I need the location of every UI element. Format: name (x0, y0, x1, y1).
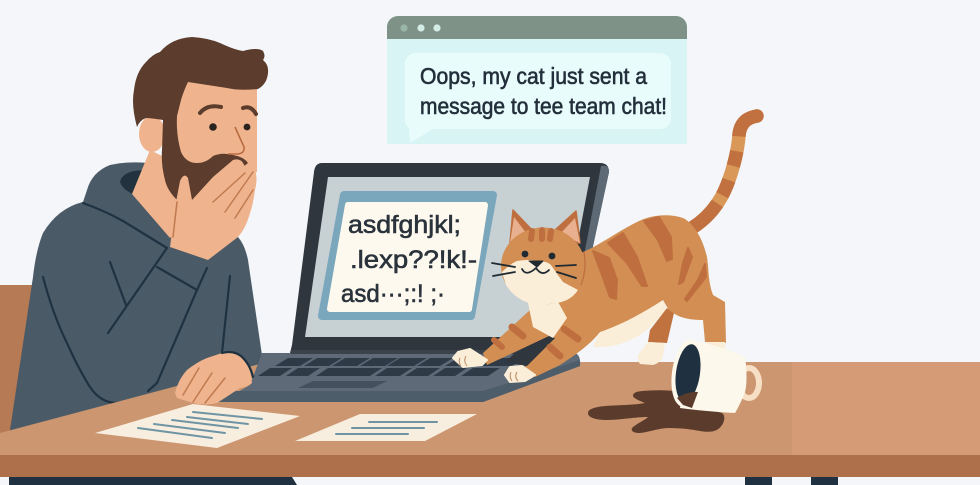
man (10, 37, 268, 432)
neck (132, 150, 200, 238)
coffee pouring out (677, 392, 698, 408)
chat message text: Oops, my cat just sent a (420, 63, 647, 89)
window control dots (400, 24, 441, 32)
man's lower hand (175, 352, 253, 404)
cat mouth (522, 268, 549, 273)
hand on mouth (170, 159, 256, 260)
eyes (209, 123, 250, 131)
table (0, 362, 980, 477)
hair and beard (133, 37, 268, 200)
paper right (295, 414, 477, 441)
cat (453, 109, 764, 382)
gibberish text: asdfghjkl; (348, 211, 461, 239)
text window paper (330, 205, 485, 309)
cat whiskers (492, 263, 576, 278)
chat message text (420, 63, 667, 119)
laptop lid and screen (290, 163, 609, 353)
cat muzzle (502, 260, 578, 305)
cat chest (528, 300, 567, 338)
cat eyes (522, 251, 555, 259)
cat head stripes (531, 230, 551, 239)
chair (0, 285, 32, 440)
panel: chat window (387, 16, 687, 144)
speech bubble (405, 53, 671, 143)
gap between arms (505, 336, 555, 366)
hood inner (120, 170, 147, 194)
paper left (95, 404, 300, 448)
eyebrows (200, 106, 256, 114)
chat window title bar (387, 16, 687, 39)
cat head (501, 228, 585, 304)
gibberish text (341, 211, 477, 308)
hinge (291, 350, 561, 354)
lid edge highlight (564, 166, 609, 353)
gibberish text: .lexp??!k!- (350, 246, 477, 274)
cat neck line (581, 252, 585, 285)
mug rim (667, 337, 707, 409)
cat stripes (593, 217, 706, 301)
cat nose (529, 261, 543, 267)
coffee mug (667, 337, 759, 413)
text window frame (322, 195, 493, 316)
mug opening (672, 343, 704, 403)
table legs (745, 477, 838, 485)
face (175, 80, 257, 185)
mug handle (739, 368, 759, 398)
hoodie (10, 162, 263, 432)
laptop base (218, 350, 580, 402)
chat message text: message to tee team chat! (420, 93, 667, 119)
keyboard keys (258, 358, 525, 376)
sleeve cuff line (222, 352, 253, 377)
coffee spill (588, 390, 724, 433)
cat belly (593, 300, 667, 347)
arm stripes (494, 327, 578, 356)
finger lines (173, 172, 253, 237)
cat rear paw (638, 342, 665, 365)
ear (139, 116, 165, 152)
cat rear foot (707, 342, 725, 350)
cat body (483, 215, 726, 377)
cat rear leg far (648, 308, 674, 343)
screen (305, 177, 590, 337)
trackpad (298, 381, 387, 388)
mug body (680, 341, 746, 413)
cat ears (510, 210, 580, 243)
table right panel (792, 362, 980, 455)
laptop front edge (218, 360, 580, 402)
cat tail (692, 109, 764, 228)
gibberish text: asd···;:! ;· (341, 280, 445, 308)
hoodie seams (43, 203, 230, 403)
table front edge (0, 455, 980, 477)
trousers (9, 477, 297, 485)
cat paws (453, 349, 535, 382)
nose (228, 127, 244, 154)
